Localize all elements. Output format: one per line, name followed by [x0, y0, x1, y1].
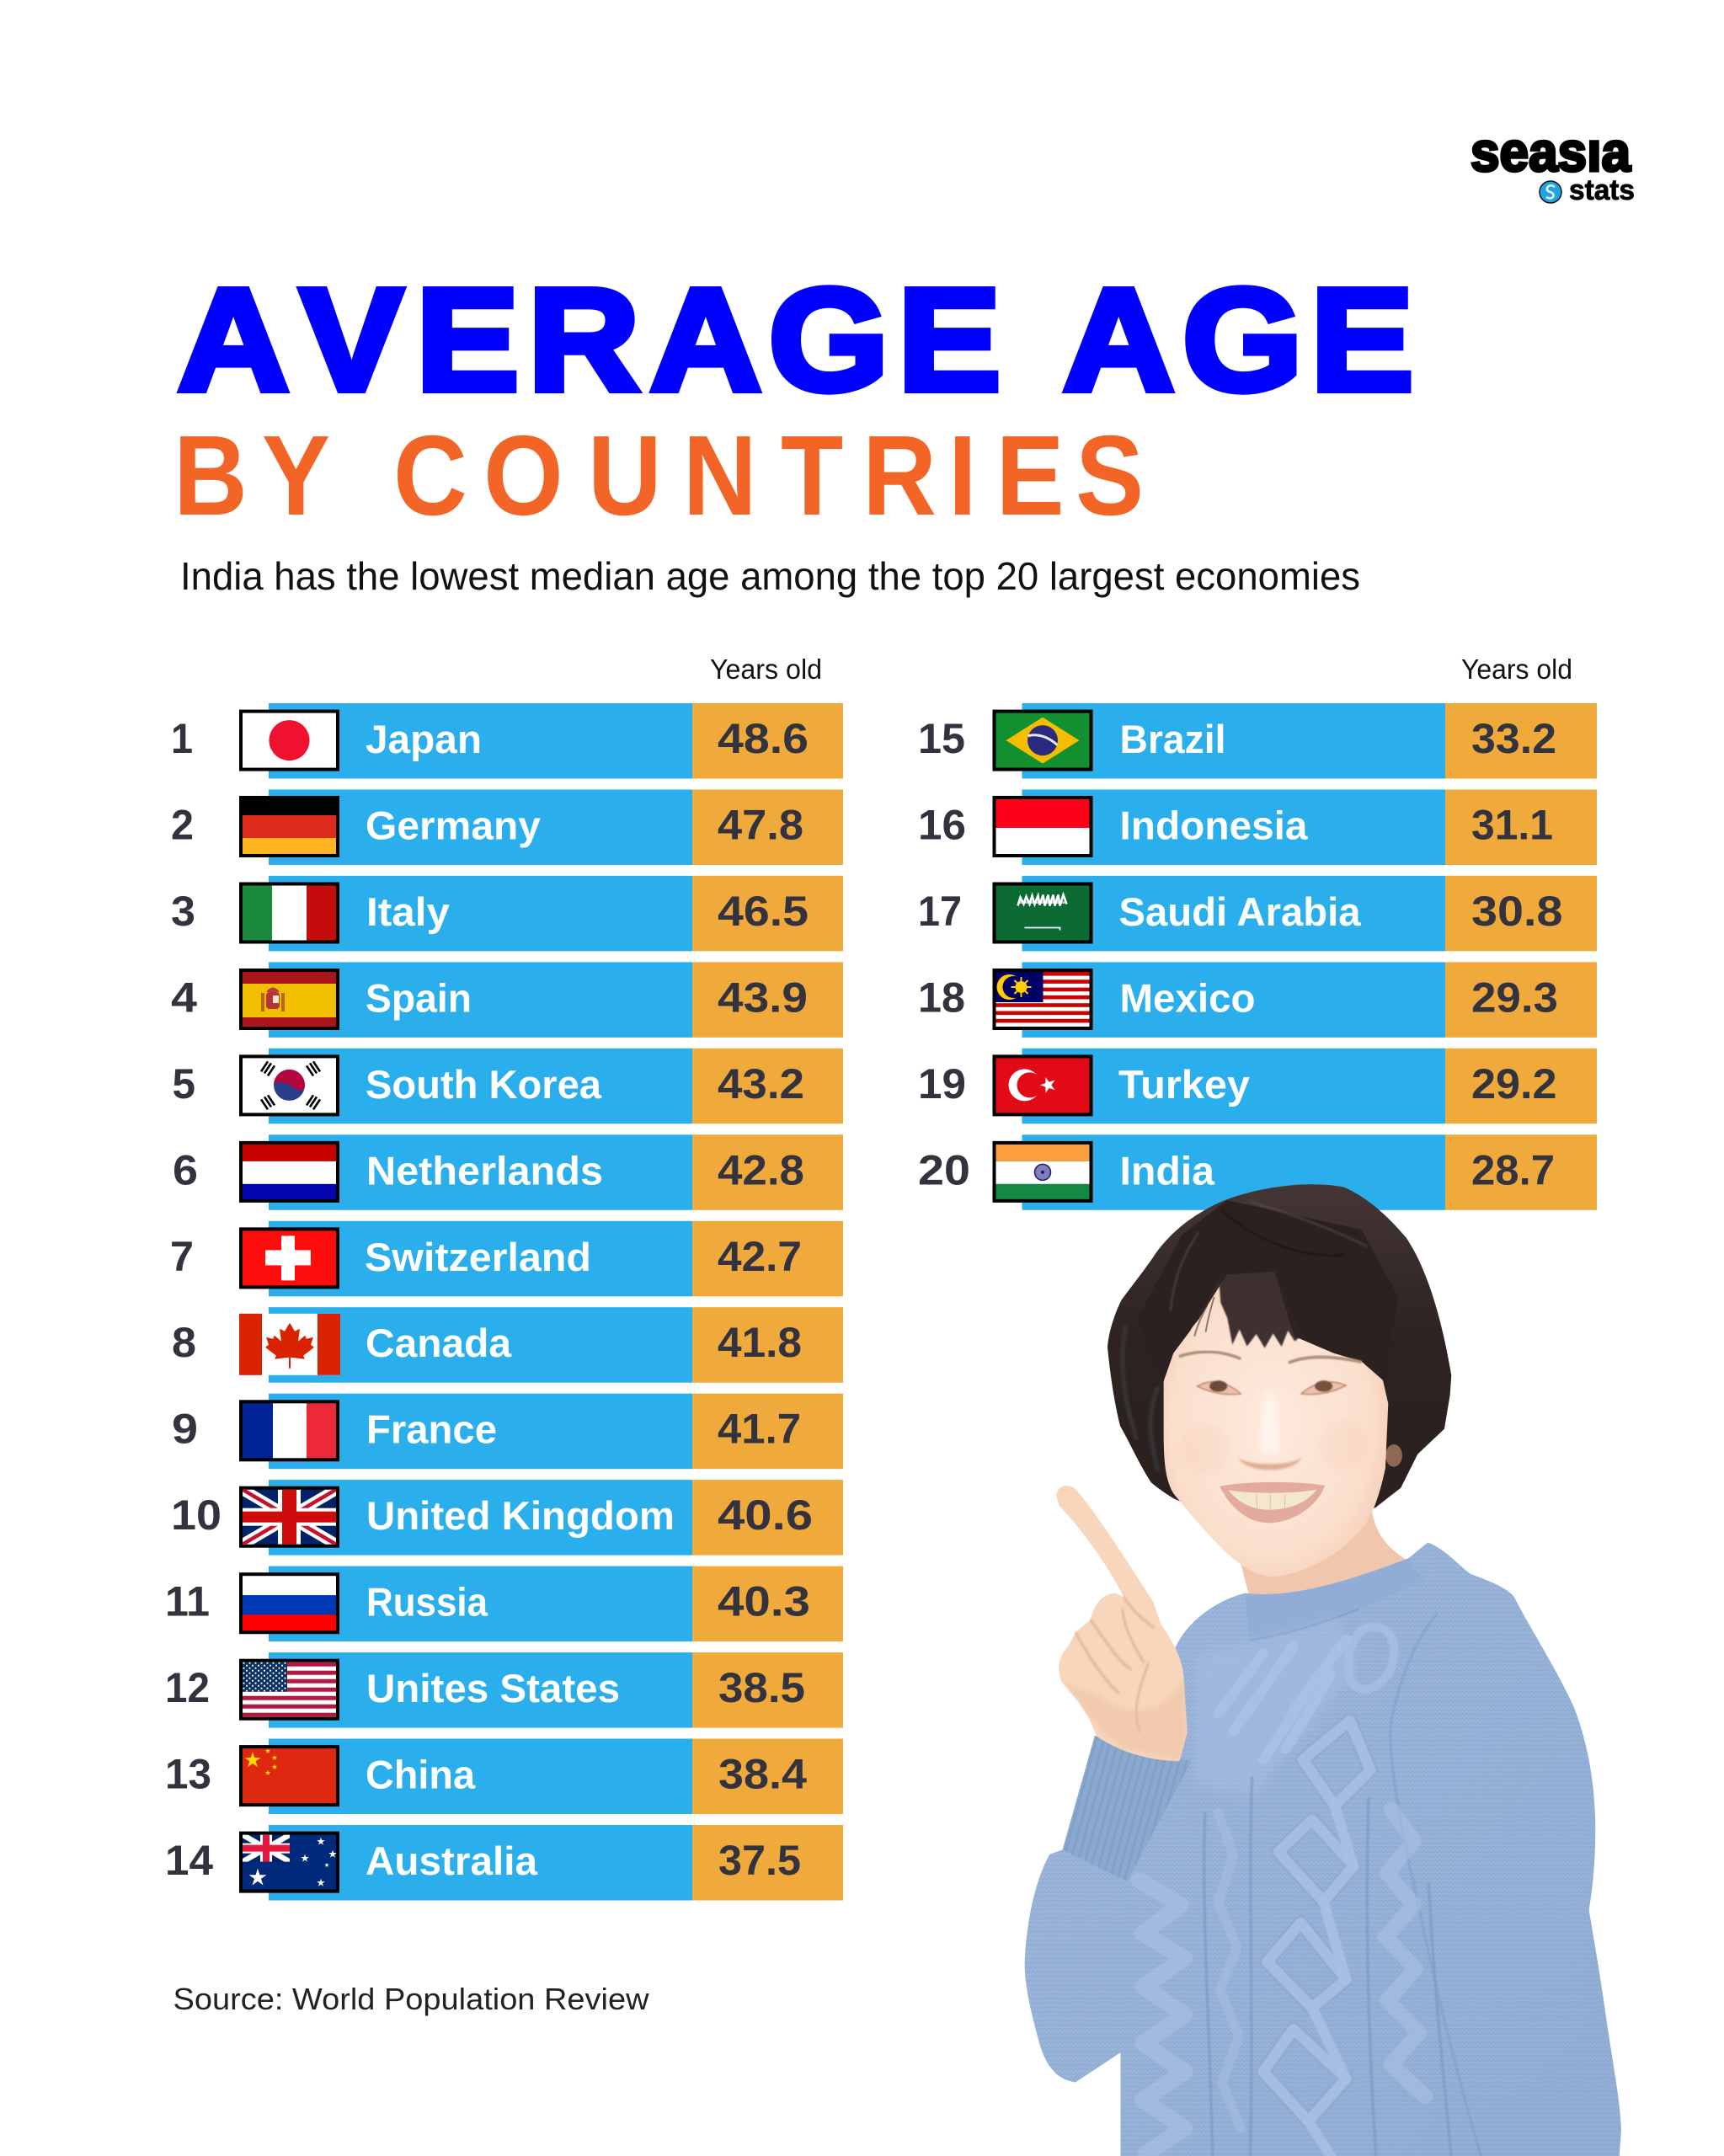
rank 5: 5	[172, 1060, 195, 1107]
flag: Switzerland	[239, 1227, 339, 1289]
value: 40.6	[718, 1492, 813, 1539]
name: Russia	[366, 1580, 488, 1625]
rank 10: 10	[171, 1492, 222, 1539]
value: 41.7	[718, 1406, 801, 1453]
row 8: Canada	[172, 1307, 843, 1383]
row 12: United States	[165, 1652, 843, 1728]
flag: Brazil	[992, 710, 1093, 771]
cheeks and nose	[1179, 1392, 1370, 1474]
rank 19: 19	[918, 1060, 966, 1107]
value: 40.3	[718, 1578, 810, 1625]
rank 6: 6	[173, 1146, 198, 1193]
name: Netherlands	[366, 1148, 603, 1193]
cuff ribbing	[1063, 1736, 1192, 1881]
flag: Indonesia	[992, 796, 1093, 857]
name: Brazil	[1120, 717, 1226, 761]
row 13: China	[165, 1738, 843, 1814]
row 4: Spain	[171, 962, 843, 1038]
column header: left: Years old	[710, 654, 822, 685]
logo sub-word: stats	[1569, 174, 1635, 206]
rank 20: 20	[918, 1146, 970, 1193]
value: 28.7	[1471, 1146, 1555, 1193]
row 6: Netherlands	[173, 1134, 843, 1210]
name: Canada	[366, 1321, 512, 1365]
row 16: Indonesia	[918, 790, 1597, 865]
name: India	[1120, 1148, 1215, 1193]
flag: India	[992, 1141, 1093, 1203]
name: Saudi Arabia	[1118, 889, 1361, 934]
row 7: Switzerland	[170, 1221, 843, 1296]
flag: United Kingdom	[239, 1486, 339, 1548]
flag: Germany	[239, 796, 339, 857]
name: South Korea	[366, 1062, 602, 1107]
value: 38.4	[718, 1750, 807, 1797]
flag: Australia	[239, 1832, 339, 1893]
row 17: Saudi Arabia	[918, 876, 1597, 951]
value: 29.2	[1471, 1060, 1557, 1107]
value: 48.6	[718, 715, 809, 762]
rank 13: 13	[165, 1750, 211, 1797]
flag: Canada	[239, 1314, 340, 1375]
name: Italy	[366, 889, 450, 934]
row 1: Japan	[171, 703, 843, 778]
row 3: Italy	[171, 876, 843, 951]
row 18: Mexico	[918, 962, 1597, 1038]
head	[1108, 1184, 1451, 1577]
name: Mexico	[1120, 975, 1255, 1020]
ear	[1385, 1444, 1402, 1467]
rank 4: 4	[171, 974, 197, 1021]
row 2: Germany	[171, 790, 843, 865]
value: 37.5	[718, 1837, 801, 1884]
name: Spain	[366, 975, 472, 1020]
row 5: South Korea	[172, 1049, 843, 1123]
eyes	[1198, 1380, 1346, 1395]
neck and pointing hand	[1056, 1486, 1188, 1761]
name: France	[366, 1407, 497, 1452]
sweater and arm	[1025, 1511, 1621, 2156]
flag: Mexico (drawn as in source)	[992, 969, 1093, 1030]
logo: seasia stats	[1470, 118, 1635, 206]
rank 17: 17	[918, 888, 962, 935]
flag: Russia	[239, 1572, 339, 1634]
flag: Italy	[239, 883, 339, 943]
yoke cable shading	[1196, 1619, 1359, 1796]
flag: South Korea	[239, 1054, 339, 1116]
logo icon	[1540, 181, 1561, 203]
flag: Netherlands	[239, 1141, 339, 1203]
smile	[1220, 1482, 1325, 1523]
row 14: Australia	[165, 1825, 843, 1900]
rank 1: 1	[171, 715, 193, 762]
name: Germany	[366, 803, 541, 847]
value: 42.7	[718, 1233, 802, 1280]
collar	[1245, 1558, 1423, 1641]
rank 8: 8	[172, 1319, 196, 1366]
flag: China	[239, 1745, 339, 1806]
rank 18: 18	[918, 974, 965, 1021]
rank 16: 16	[918, 802, 966, 849]
tagline: India has the lowest median age among the top 20 largest economies	[180, 554, 1360, 598]
flag: Saudi Arabia	[992, 883, 1093, 943]
name: China	[366, 1752, 476, 1797]
name: Switzerland	[365, 1235, 591, 1279]
name: Unites States	[366, 1666, 620, 1710]
illustration: smiling woman in blue sweater pointing up	[1025, 1184, 1621, 2156]
rank 2: 2	[171, 802, 194, 849]
name: Japan	[366, 717, 482, 761]
flag: Turkey	[992, 1054, 1093, 1116]
name: United Kingdom	[366, 1493, 675, 1538]
value: 29.3	[1471, 974, 1558, 1021]
title: AVERAGE AGE	[178, 259, 1413, 421]
row 9: France	[172, 1394, 843, 1469]
rank 7: 7	[170, 1233, 194, 1280]
row 20: India	[918, 1134, 1597, 1210]
value: 43.9	[718, 974, 808, 1021]
value: 31.1	[1471, 802, 1553, 849]
rank 3: 3	[171, 888, 195, 935]
flag: United States	[239, 1659, 339, 1721]
row 11: Russia	[165, 1566, 843, 1641]
row 19: Turkey	[918, 1049, 1597, 1123]
rank 11: 11	[165, 1578, 210, 1625]
flag: Japan	[239, 710, 339, 771]
value: 30.8	[1471, 888, 1563, 935]
rank 15: 15	[918, 715, 965, 762]
flag: France	[239, 1400, 339, 1461]
row 15: Brazil	[918, 703, 1597, 778]
bangs	[1137, 1200, 1398, 1381]
value: 43.2	[718, 1060, 804, 1107]
name: Indonesia	[1120, 803, 1308, 847]
hair	[1108, 1184, 1451, 1544]
flag: Spain	[239, 969, 339, 1030]
logo wordmark: seasia	[1470, 120, 1631, 183]
rank 9: 9	[172, 1406, 198, 1453]
value: 41.8	[718, 1319, 802, 1366]
value: 46.5	[718, 888, 809, 935]
source note: Source: World Population Review	[173, 1982, 650, 2016]
value: 42.8	[718, 1146, 804, 1193]
face	[1164, 1272, 1388, 1577]
column header: right: Years old	[1461, 654, 1572, 685]
eyebrows	[1179, 1352, 1362, 1363]
value: 33.2	[1471, 715, 1556, 762]
name: Australia	[366, 1838, 538, 1883]
row 10: United Kingdom	[171, 1480, 843, 1556]
rank 14: 14	[165, 1837, 213, 1884]
value: 38.5	[718, 1664, 805, 1711]
cable knit panels	[1140, 1614, 1481, 2156]
name: Turkey	[1118, 1062, 1250, 1107]
value: 47.8	[718, 802, 803, 849]
subtitle: by countries: BY COUNTRIES	[173, 413, 1144, 539]
rank 12: 12	[165, 1664, 210, 1711]
